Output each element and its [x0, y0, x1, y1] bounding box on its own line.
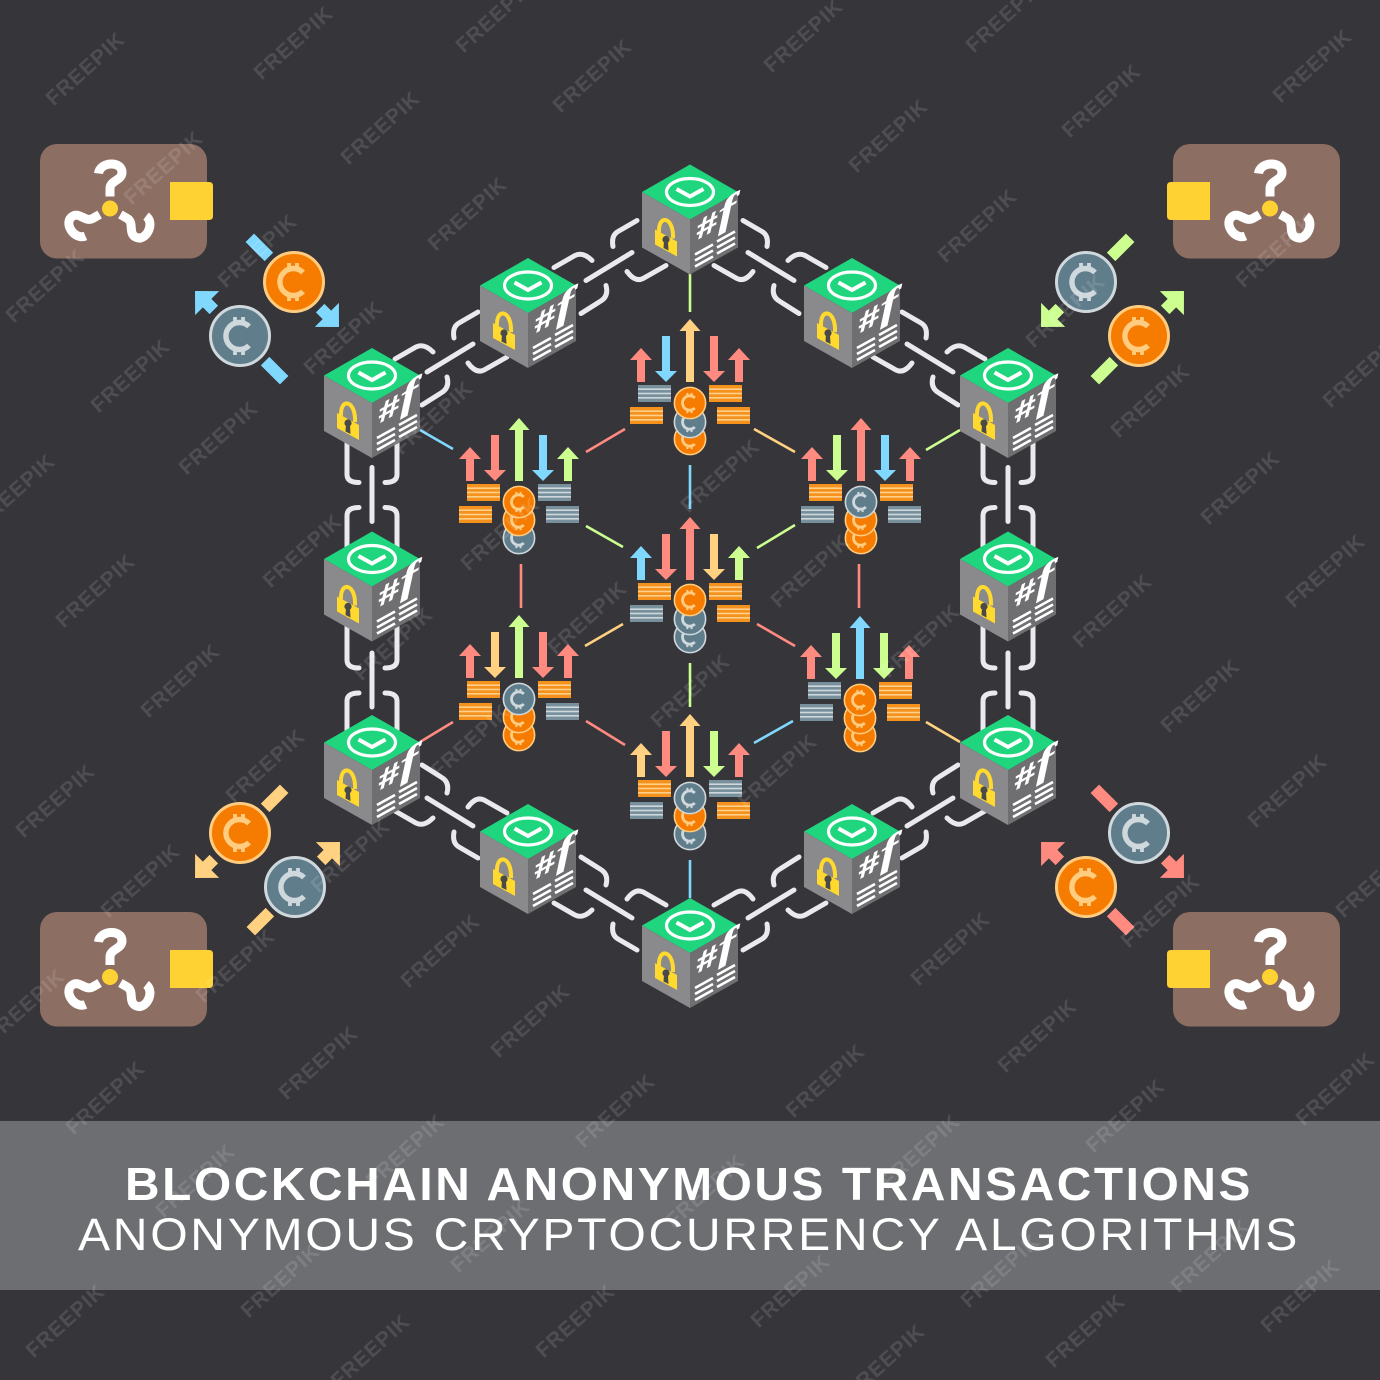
block cube: upper left 2 [324, 348, 422, 458]
watermarks: FREEPIK [662, 1150, 750, 1233]
watermarks: FREEPIK [152, 1140, 240, 1223]
watermarks: FREEPIK [2, 245, 90, 328]
block cube: middle right [960, 532, 1058, 642]
thin connector lines between nodes [420, 273, 960, 898]
watermarks: FREEPIK [87, 335, 175, 418]
watermarks: FREEPIK [307, 815, 395, 898]
watermarks: FREEPIK [427, 700, 515, 783]
watermarks: FREEPIK [300, 297, 388, 380]
watermarks: FREEPIK [1292, 1048, 1380, 1131]
watermarks: FREEPIK [747, 1250, 835, 1333]
transaction cluster: lower left [459, 615, 579, 751]
watermarks: FREEPIK [97, 840, 185, 923]
block cube: upper left 2: #f [378, 366, 422, 432]
watermarks: FREEPIK [877, 1110, 965, 1193]
block cube: lower right 1: #f [858, 822, 902, 888]
watermarks: FREEPIK [120, 127, 208, 210]
block cube: bottom [642, 898, 740, 1008]
block cube: bottom: #f [696, 916, 740, 982]
transaction cluster: bottom [630, 714, 750, 850]
watermarks: FREEPIK [1232, 210, 1320, 293]
watermarks: FREEPIK [1058, 60, 1146, 143]
watermarks: FREEPIK [957, 1230, 1045, 1313]
block cube: lower right 1 [804, 804, 902, 914]
watermarks: FREEPIK [1257, 1255, 1345, 1338]
watermarks: FREEPIK [1167, 1215, 1255, 1298]
watermarks: FREEPIK [237, 1240, 325, 1323]
watermarks: FREEPIK [447, 1195, 535, 1278]
watermarks: FREEPIK [1042, 1290, 1130, 1373]
watermarks: FREEPIK [907, 908, 995, 991]
block cube: middle left [324, 532, 422, 642]
title line 2: ANONYMOUS CRYPTOCURRENCY ALGORITHMS [78, 1209, 1300, 1260]
watermarks: FREEPIK [734, 730, 822, 813]
transaction cluster: upper right [801, 418, 921, 554]
watermarks: FREEPIK [487, 980, 575, 1063]
block cube: upper left 1: #f [534, 276, 578, 342]
watermarks: FREEPIK [994, 995, 1082, 1078]
watermarks: FREEPIK [1117, 870, 1205, 953]
block cube: lower right 2 [960, 715, 1058, 825]
title banner [0, 1121, 1380, 1290]
watermarks: FREEPIK [572, 1070, 660, 1153]
watermarks: FREEPIK [275, 1022, 363, 1105]
watermarks: FREEPIK [52, 550, 140, 633]
watermarks: FREEPIK [845, 95, 933, 178]
watermarks: FREEPIK [647, 650, 735, 733]
chain links around the hexagon [347, 220, 1033, 950]
block cube: top: #f [696, 183, 740, 249]
watermarks: FREEPIK [1069, 570, 1157, 653]
watermarks: FREEPIK [192, 925, 280, 1008]
watermarks: FREEPIK [175, 397, 263, 480]
block cube: upper right 2 [960, 348, 1058, 458]
watermarks: FREEPIK [214, 210, 302, 293]
coin exchange: bottom right [1029, 777, 1196, 943]
watermarks: FREEPIK [390, 377, 478, 460]
watermarks: FREEPIK [222, 725, 310, 808]
watermarks: FREEPIK [1022, 270, 1110, 353]
wallet: top left [40, 144, 213, 258]
watermarks: FREEPIK [250, 2, 338, 85]
watermarks: FREEPIK [782, 1040, 870, 1123]
watermarks: FREEPIK [350, 603, 438, 686]
coin exchange: top left [183, 226, 351, 392]
block cube: upper right 2: #f [1014, 366, 1058, 432]
watermarks: FREEPIK [1082, 1075, 1170, 1158]
watermarks: FREEPIK [62, 1057, 150, 1140]
watermarks: FREEPIK [877, 600, 965, 683]
watermarks: FREEPIK [1282, 530, 1370, 613]
block cube: lower left 2: #f [378, 733, 422, 799]
block cube: lower left 1: #f [534, 822, 578, 888]
watermarks: FREEPIK [397, 910, 485, 993]
coin exchange: top right [1029, 226, 1196, 392]
watermarks: FREEPIK [1157, 655, 1245, 738]
watermarks: FREEPIK [22, 1280, 110, 1363]
watermarks: FREEPIK [137, 640, 225, 723]
block cube: upper right 1: #f [858, 276, 902, 342]
transaction cluster: lower right [800, 616, 920, 752]
wallet: top right [1167, 144, 1340, 258]
watermarks: FREEPIK [362, 1110, 450, 1193]
block cube: upper right 1 [804, 258, 902, 368]
watermarks: FREEPIK [934, 185, 1022, 268]
block cube: lower right 2: #f [1014, 733, 1058, 799]
transaction cluster: center [630, 517, 750, 653]
watermarks: FREEPIK [259, 510, 347, 593]
block cube: middle right: #f [1014, 550, 1058, 616]
watermarks: FREEPIK [337, 87, 425, 170]
watermarks: FREEPIK [544, 577, 632, 660]
block cube: middle left: #f [378, 550, 422, 616]
watermarks: FREEPIK [549, 35, 637, 118]
block cube: top [642, 164, 740, 274]
watermarks: FREEPIK [457, 493, 545, 576]
block cube: lower left 1 [480, 804, 578, 914]
transaction cluster: upper left [459, 418, 579, 554]
watermarks: FREEPIK [1107, 360, 1195, 443]
watermarks: FREEPIK [1269, 25, 1357, 108]
block cube: upper left 1 [480, 258, 578, 368]
transaction cluster: top [630, 319, 750, 455]
watermarks: FREEPIK [677, 435, 765, 518]
wallet: bottom left [40, 912, 213, 1026]
watermarks: FREEPIK [767, 530, 855, 613]
watermarks: FREEPIK [42, 28, 130, 111]
watermarks: FREEPIK [424, 173, 512, 256]
watermarks: FREEPIK [1197, 447, 1285, 530]
watermarks: FREEPIK [12, 760, 100, 843]
title line 1: BLOCKCHAIN ANONYMOUS TRANSACTIONS [125, 1158, 1253, 1210]
wallet: bottom right [1167, 912, 1340, 1026]
watermarks: FREEPIK [532, 1280, 620, 1363]
block cube: lower left 2 [324, 715, 422, 825]
coin exchange: bottom left [183, 777, 352, 943]
watermarks: FREEPIK [1244, 750, 1332, 833]
